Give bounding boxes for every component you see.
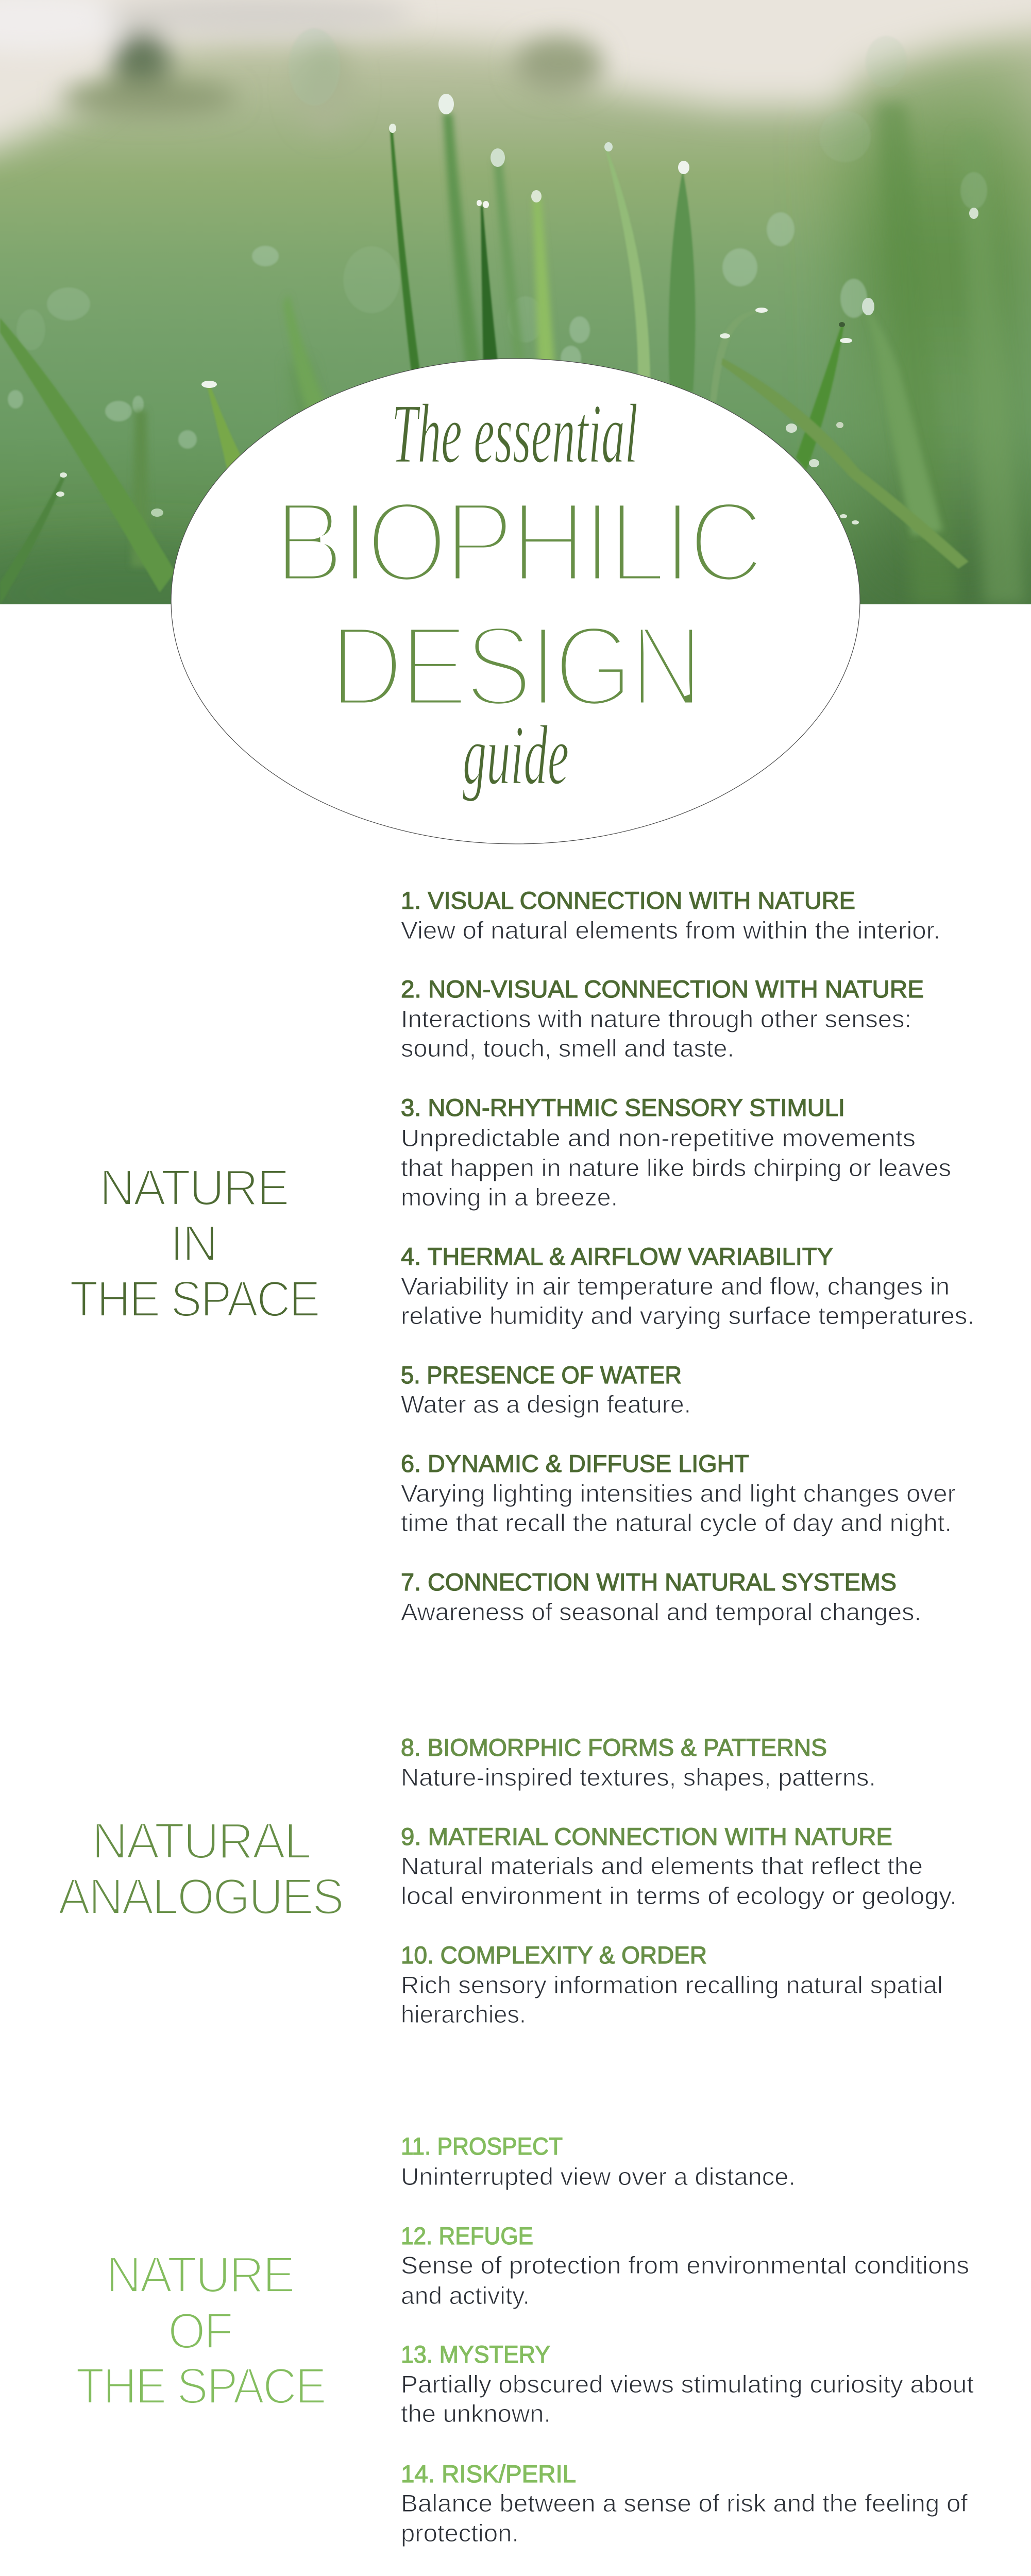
item 11: 11. PROSPECT [401,2132,563,2160]
item 10: 10. COMPLEXITY & ORDER [401,1941,707,1969]
item 6: Varying lighting intensities and light changes over [401,1480,956,1507]
item 3 [401,1094,951,1211]
section heading: Nature in the Space [70,1159,319,1327]
blurred vertical streaks on the right [289,103,1025,604]
item 5 [401,1361,691,1418]
item 11: Uninterrupted view over a distance. [401,2163,796,2190]
item 12 [401,2222,969,2309]
item 14: Balance between a sense of risk and the feeling of [401,2489,968,2517]
section heading: Nature of the Space: THE SPACE [76,2358,325,2414]
panel: natural analogues list [401,1734,957,2028]
cream sky band [0,0,1031,160]
item 14 [401,2460,968,2547]
title word: BIOPHILIC: BIOPHILIC [274,478,760,606]
section heading: Natural Analogues: NATURAL [92,1812,310,1869]
photo: blurred grass with dew drops [0,0,1031,629]
item 13 [401,2341,974,2427]
section heading: Nature of the Space [76,2246,325,2414]
item 12: and activity. [401,2282,530,2309]
item 9: Natural materials and elements that reflect the [401,1852,923,1879]
item 6 [401,1450,956,1536]
item 8: Nature-inspired textures, shapes, patterns. [401,1764,876,1791]
item 5: 5. PRESENCE OF WATER [401,1361,682,1388]
section heading: Natural Analogues: ANALOGUES [58,1868,343,1925]
item 4: relative humidity and varying surface temperatures. [401,1302,974,1329]
item 7: Awareness of seasonal and temporal changes. [401,1598,921,1625]
item 14: protection. [401,2519,519,2547]
dew drops [56,94,978,524]
item 3: that happen in nature like birds chirping or leaves [401,1154,951,1181]
item 8: 8. BIOMORPHIC FORMS & PATTERNS [401,1734,827,1761]
item 11 [401,2132,796,2190]
item 6: 6. DYNAMIC & DIFFUSE LIGHT [401,1450,749,1477]
item 3: 3. NON-RHYTHMIC SENSORY STIMULI [401,1094,845,1121]
section heading: Nature in the Space: THE SPACE [70,1270,319,1327]
item 2: Interactions with nature through other senses: [401,1005,911,1032]
item 4 [401,1243,974,1329]
item 7: 7. CONNECTION WITH NATURAL SYSTEMS [401,1568,897,1596]
item 4: 4. THERMAL & AIRFLOW VARIABILITY [401,1243,833,1270]
blurred mid blades [131,113,943,567]
item 12: Sense of protection from environmental conditions [401,2251,969,2279]
item 14: 14. RISK/PERIL [401,2460,576,2487]
sharp blades [0,128,969,605]
item 4: Variability in air temperature and flow, changes in [401,1273,950,1300]
section heading: Nature in the Space: NATURE [99,1159,288,1216]
item 6: time that recall the natural cycle of day and night. [401,1509,952,1536]
item 13: 13. MYSTERY [401,2341,550,2368]
title oval [171,359,860,844]
section heading: Nature in the Space: IN [170,1215,216,1272]
bokeh circles [8,28,987,449]
item 9 [401,1823,957,1909]
item 13: Partially obscured views stimulating curiosity about [401,2370,974,2398]
blurred background shapes [0,0,603,131]
item 13: the unknown. [401,2400,551,2427]
panel: nature of the space list [401,2132,974,2547]
item 9: local environment in terms of ecology or geology. [401,1882,957,1909]
panel: nature in the space list [401,887,974,1625]
title word: DESIGN: DESIGN [330,602,700,731]
item 8 [401,1734,876,1791]
item 3: moving in a breeze. [401,1183,618,1211]
section heading: Natural Analogues [58,1812,343,1925]
item 9: 9. MATERIAL CONNECTION WITH NATURE [401,1823,892,1850]
script line: guide: guide [463,708,569,802]
item 10: Rich sensory information recalling natural spatial [401,1971,943,1998]
item 2: 2. NON-VISUAL CONNECTION WITH NATURE [401,975,924,1003]
right-side darker grass mass [109,39,1031,589]
item 10 [401,1941,943,2028]
item 1: View of natural elements from within the interior. [401,917,940,944]
item 12: 12. REFUGE [401,2222,533,2249]
section heading: Nature of the Space: OF [168,2302,232,2359]
item 1 [401,887,940,944]
item 10: hierarchies. [401,2001,526,2028]
item 5: Water as a design feature. [401,1391,691,1418]
item 2 [401,975,924,1062]
script line: The essential: The essential [392,386,638,481]
item 2: sound, touch, smell and taste. [401,1035,734,1062]
section heading: Nature of the Space: NATURE [106,2246,294,2303]
item 7 [401,1568,921,1625]
item 1: 1. VISUAL CONNECTION WITH NATURE [401,887,855,914]
item 3: Unpredictable and non-repetitive movements [401,1124,916,1151]
